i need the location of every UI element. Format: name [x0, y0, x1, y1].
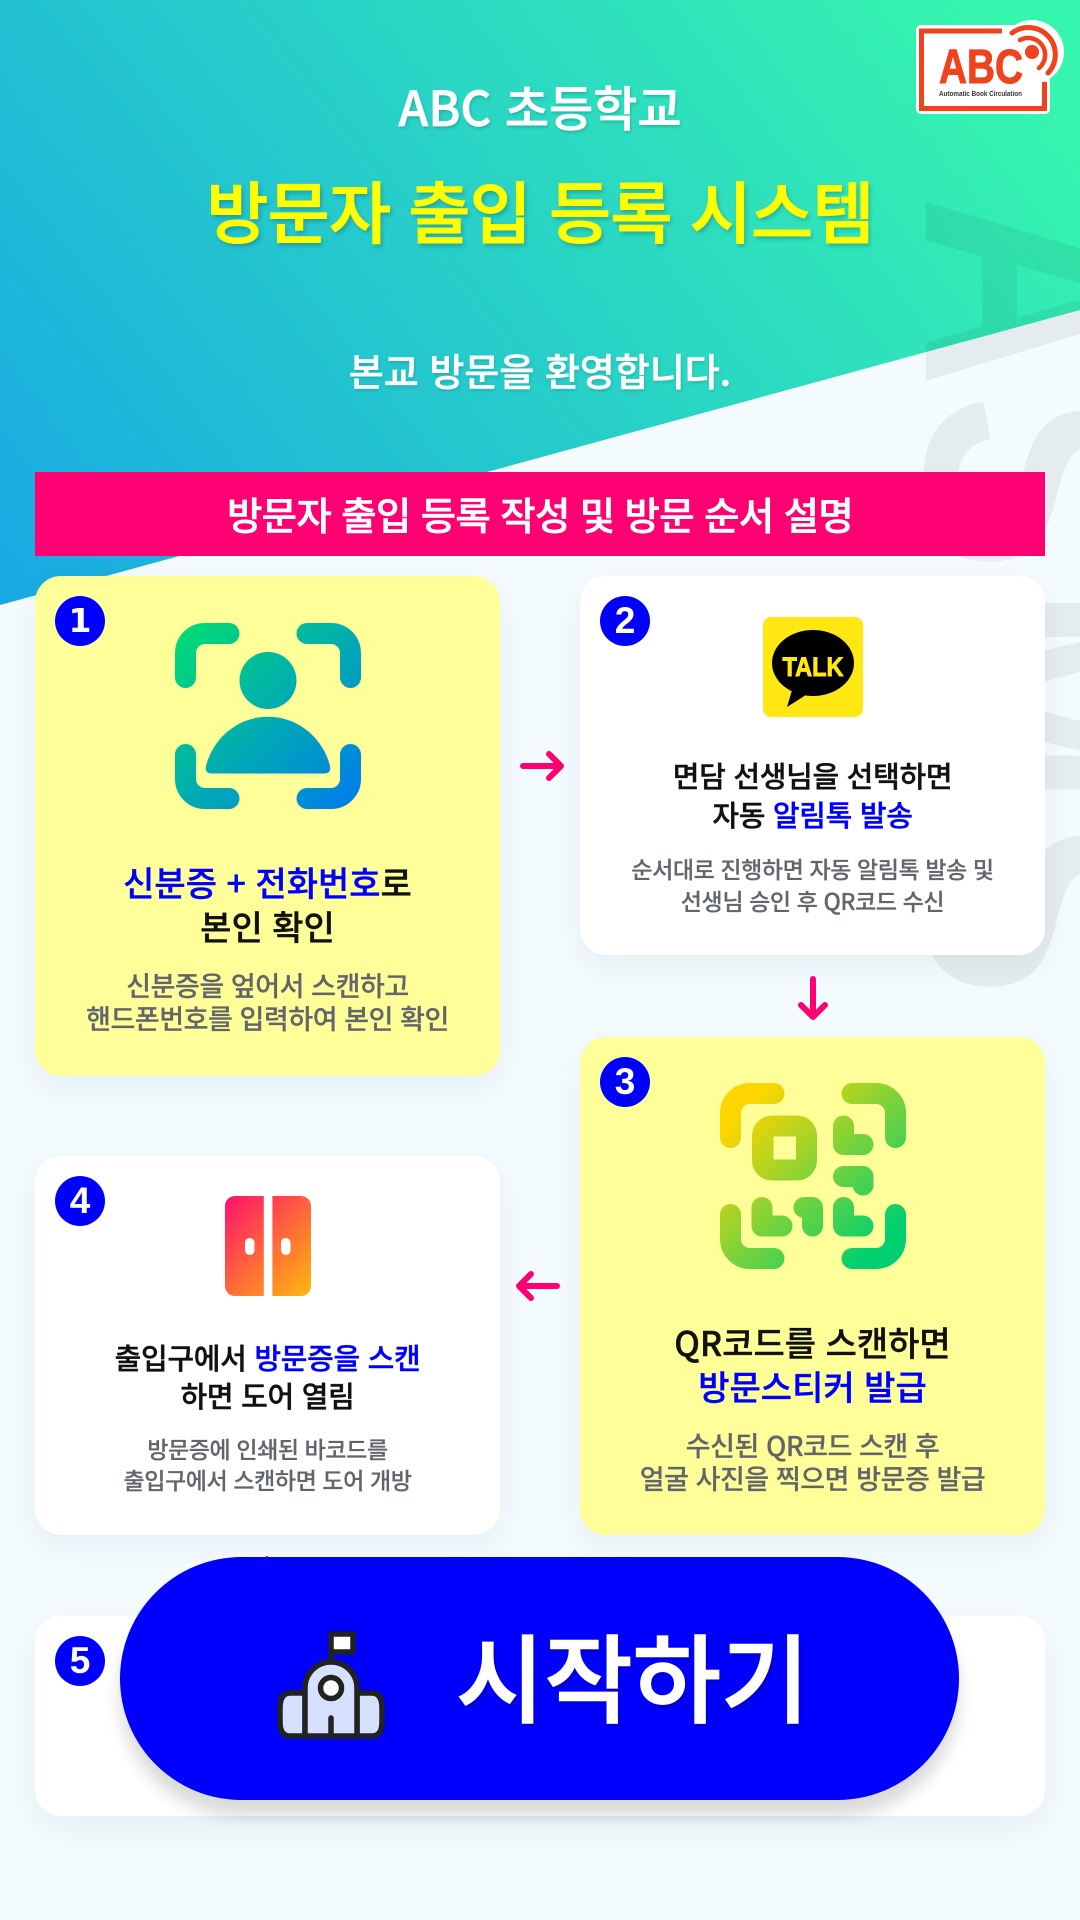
step number 1 [55, 596, 105, 646]
arrow: step 3 to step 4 [516, 1271, 560, 1301]
section banner [35, 472, 1045, 556]
step 3 heading: QR코드를 스캔하면 [674, 1317, 951, 1366]
step number 5 [55, 1636, 105, 1686]
panel: step 2 [580, 576, 1045, 955]
banner text: 방문자 출입 등록 작성 및 방문 순서 설명 [227, 486, 853, 542]
panel: step 5 [35, 1616, 1045, 1816]
button label: 시작하기 [456, 1604, 809, 1743]
welcome text: 본교 방문을 환영합니다. [349, 342, 731, 397]
step 4 description: 방문증에 인쇄된 바코드를 [147, 1431, 388, 1465]
step number 2 [600, 596, 650, 646]
icon: school [277, 1631, 385, 1739]
step 3 heading [674, 1317, 951, 1410]
icon: KakaoTalk: TALK [782, 652, 844, 682]
icon: double door [225, 1196, 311, 1296]
step 3 description: 수신된 QR코드 스캔 후 [686, 1425, 939, 1464]
step number 4: 4 [70, 1180, 90, 1221]
icon: QR scan [720, 1083, 906, 1269]
icon: face scan [175, 623, 361, 809]
step 1 heading: 신분증 + 전화번호로 [123, 857, 412, 906]
start button [120, 1557, 959, 1800]
main title: 방문자 출입 등록 시스템 [206, 161, 874, 258]
arrow: step 2 to step 3 [798, 976, 828, 1020]
icon: KakaoTalk [763, 617, 863, 717]
step 1 description [86, 965, 449, 1037]
step 3 description: 얼굴 사진을 찍으면 방문증 발급 [640, 1458, 985, 1497]
step 2 heading: 자동 알림톡 발송 [712, 793, 913, 835]
step number 3: 3 [615, 1061, 635, 1102]
arrow: step 4 to step 5, mostly hidden [266, 1556, 268, 1557]
step 4 heading: 하면 도어 열림 [181, 1374, 354, 1416]
step 4 heading [115, 1336, 420, 1416]
step 3 description [640, 1425, 985, 1497]
step 2 description [631, 851, 994, 917]
step number 2: 2 [615, 600, 635, 641]
step 2 description: 선생님 승인 후 QR코드 수신 [681, 883, 944, 917]
step 1 heading: 본인 확인 [200, 901, 335, 950]
step 1 description: 신분증을 엎어서 스캔하고 [126, 965, 409, 1004]
step number 3 [600, 1057, 650, 1107]
step 3 heading: 방문스티커 발급 [698, 1361, 927, 1410]
step 4 description [123, 1431, 412, 1496]
step 4 description: 출입구에서 스캔하면 도어 개방 [123, 1462, 412, 1496]
step number 4 [55, 1176, 105, 1226]
step 1 heading [123, 857, 412, 950]
logo: ABC Automatic Book Circulation: ABC [939, 41, 1023, 94]
school name heading: ABC 초등학교 [399, 70, 681, 140]
panel: step 1 [35, 576, 500, 1076]
step number 1: 1 [69, 601, 91, 640]
step 4 heading: 출입구에서 방문증을 스캔 [115, 1336, 420, 1378]
step 2 description: 순서대로 진행하면 자동 알림톡 발송 및 [631, 851, 994, 885]
arrow: step 1 to step 2 [520, 751, 564, 781]
logo: ABC Automatic Book Circulation [916, 20, 1064, 114]
panel: step 4 [35, 1156, 500, 1535]
panel: step 3 [580, 1037, 1045, 1535]
step 1 description: 핸드폰번호를 입력하여 본인 확인 [86, 998, 449, 1037]
logo: ABC Automatic Book Circulation: Automatic Book Circulation [939, 91, 1022, 98]
step number 5: 5 [70, 1640, 90, 1681]
step 2 heading [673, 754, 952, 835]
step 2 heading: 면담 선생님을 선택하면 [673, 754, 952, 796]
